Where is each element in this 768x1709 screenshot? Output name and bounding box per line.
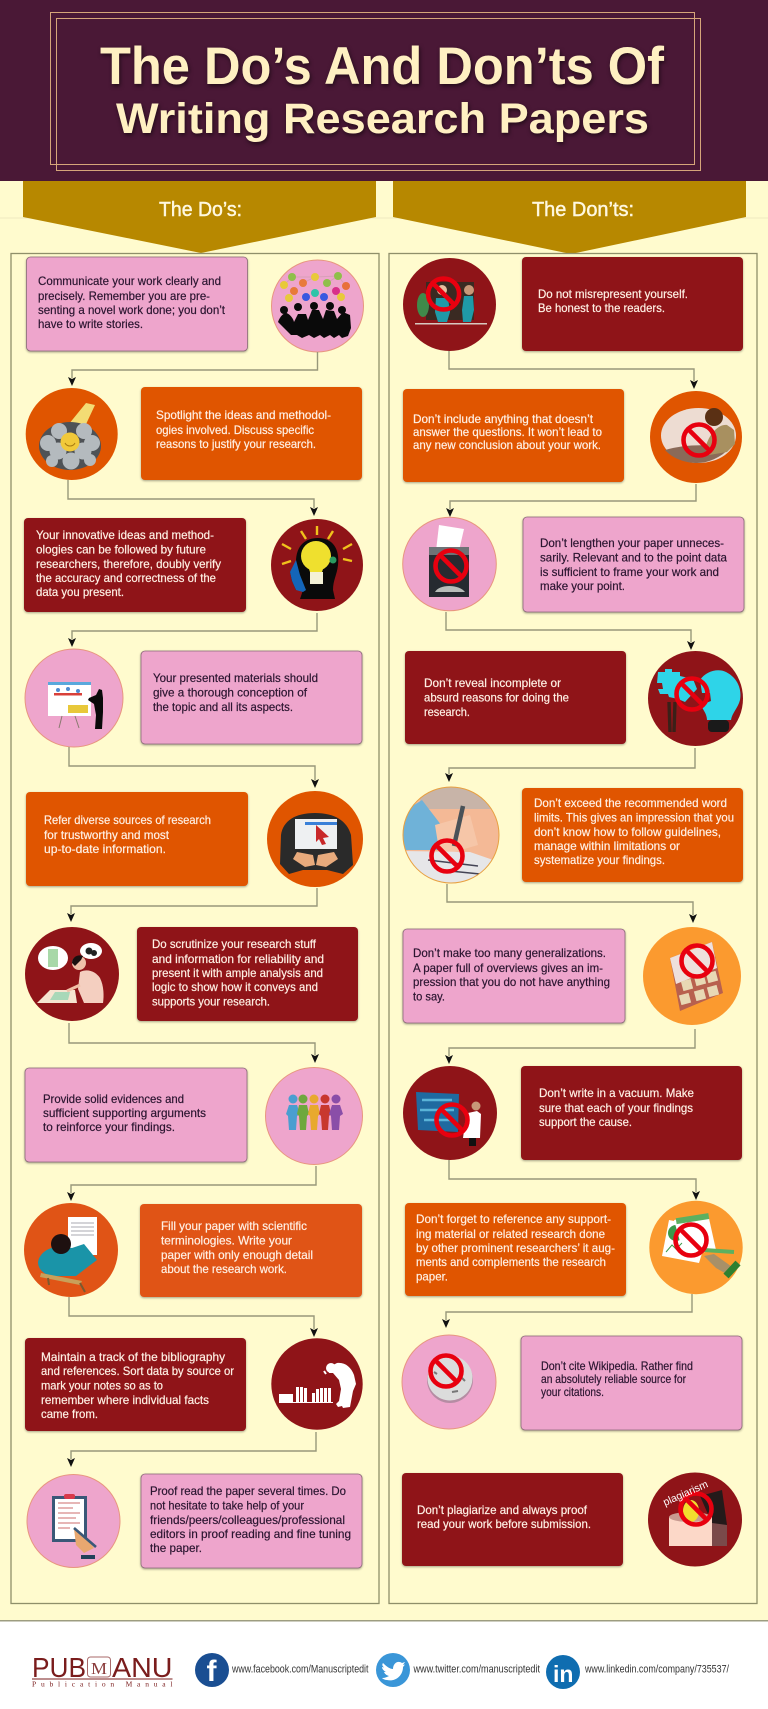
text box: for trustworthy and most [44, 828, 170, 842]
connector arrow [69, 1297, 318, 1337]
text box: Fill your paper with scientific [161, 1219, 307, 1233]
heading: The Do's: The Do’s: [159, 199, 242, 221]
icon: paper shredder, prohibited [403, 517, 496, 611]
text box: came from. [41, 1407, 98, 1421]
icon: linkedin [546, 1655, 580, 1689]
title: The Do’s And Don’ts Of [100, 37, 664, 96]
text box: Communicate your work clearly and [38, 274, 221, 288]
icon: man writing with thought bubbles [25, 927, 119, 1021]
connector arrow [445, 1029, 695, 1064]
text box: answer the questions. It won’t lead to [413, 425, 602, 439]
don't 5 [403, 787, 743, 883]
text box: A paper full of overviews gives an im- [413, 961, 603, 975]
text box: by other prominent researchers’ it aug- [416, 1241, 615, 1255]
do 4 [25, 649, 362, 747]
text box [405, 1203, 626, 1296]
text box: Your innovative ideas and method- [36, 528, 214, 542]
text box: research. [424, 705, 470, 719]
do 8 [24, 1203, 362, 1297]
connector arrow [68, 480, 318, 516]
text box: ologies can be followed by future [36, 542, 206, 556]
text box: don’t know how to follow guidelines, [534, 825, 721, 839]
icon: person at desk seen from behind [24, 1203, 118, 1297]
text box: Do scrutinize your research stuff [152, 937, 317, 951]
text box: senting a novel work done; you don’t [38, 303, 226, 317]
text box: Maintain a track of the bibliography [41, 1350, 225, 1364]
text box: make your point. [540, 579, 625, 593]
text box: remember where individual facts [41, 1393, 209, 1407]
don't 4 [405, 651, 743, 746]
text box: Be honest to the readers. [538, 301, 665, 315]
text box: paper. [416, 1270, 448, 1284]
connector arrow [445, 748, 695, 782]
text box [141, 1474, 362, 1568]
text box: Don’t make too many generalizations. [413, 946, 606, 960]
text box: Don’t reveal incomplete or [424, 676, 561, 690]
text box: manage within limitations or [534, 839, 680, 853]
text box: friends/peers/colleagues/professional [150, 1513, 345, 1527]
header banner [0, 0, 768, 181]
do 2 [26, 387, 362, 480]
text box: logic to show how it conveys and [152, 980, 318, 994]
heading: The Don'ts: The Don’ts: [532, 199, 634, 221]
icon: people at table, prohibited [403, 258, 496, 351]
icon: facebook [195, 1653, 229, 1688]
icon: spotlight on smiling ball [26, 388, 118, 480]
logo: PubManu: ANU [112, 1652, 172, 1683]
do 7 [25, 1068, 362, 1164]
icon: clipboard with hand and pen [27, 1474, 120, 1568]
heading: The Don'ts [393, 181, 746, 254]
text box: to say. [413, 990, 445, 1004]
text box: Provide solid evidences and [43, 1092, 184, 1106]
text box [141, 651, 362, 744]
text box: support the cause. [539, 1115, 632, 1129]
text box: Don’t exceed the recommended word [534, 796, 727, 810]
connector arrow [446, 612, 695, 650]
text box: Do not misrepresent yourself. [538, 287, 688, 301]
text box: give a thorough conception of [153, 686, 308, 700]
panel: do's column frame [11, 254, 379, 1604]
text box: your citations. [541, 1385, 604, 1399]
text box: editors in proof reading and fine tuning [150, 1527, 351, 1541]
text box: Don’t forget to reference any support- [416, 1212, 611, 1226]
text box: reasons to justify your research. [156, 437, 316, 451]
text box: Don’t cite Wikipedia. Rather find [541, 1359, 693, 1373]
text box [24, 518, 246, 612]
text box [140, 1204, 362, 1297]
do 3 [24, 518, 363, 612]
text box: data you present. [36, 585, 124, 599]
text box: limits. This gives an impression that you [534, 810, 734, 824]
panel: don'ts column frame [389, 254, 757, 1604]
text box: Don’t write in a vacuum. Make [539, 1086, 694, 1100]
icon: man inspecting books [271, 1338, 363, 1430]
icon: laptop typing [267, 791, 363, 887]
heading: The Do's [23, 181, 376, 253]
icon: facebook: f [206, 1655, 218, 1688]
icon: documents and pen, prohibited [649, 1201, 743, 1294]
do 1 [26, 257, 364, 352]
icon: plagiarism idea theft, prohibited: plagiarism [661, 1478, 710, 1509]
text box: Proof read the paper several times. Do [150, 1484, 346, 1498]
text box: terminologies. Write your [161, 1234, 292, 1248]
text box: pression that you do not have anything [413, 975, 610, 989]
icon: plagiarism idea theft, prohibited [648, 1472, 742, 1566]
icon: puzzle light bulb, prohibited [648, 651, 743, 746]
text box: read your work before submission. [417, 1517, 591, 1531]
do 6 [25, 927, 358, 1021]
connector arrow [68, 613, 317, 647]
icon: Wikipedia globe, prohibited [402, 1335, 496, 1429]
text box: to reinforce your findings. [43, 1120, 175, 1134]
don't 3 [403, 517, 744, 612]
text box [25, 1068, 247, 1162]
connector arrow [67, 1166, 316, 1201]
text box [403, 389, 624, 482]
icon: meeting silhouettes with idea network [272, 260, 364, 352]
icon: twitter [376, 1653, 410, 1687]
icon: sticky notes, prohibited [643, 927, 741, 1025]
logo: PubManu: Publication Manual [32, 1680, 172, 1688]
text box: systematize your findings. [534, 853, 665, 867]
connector arrow [442, 1294, 692, 1328]
text box: the topic and all its aspects. [153, 700, 293, 714]
text box [403, 929, 625, 1023]
linkedin url: www.linkedin.com/company/735537/ [584, 1664, 730, 1676]
don't 9 [402, 1335, 742, 1430]
connector arrow [69, 1023, 319, 1063]
connector arrow [449, 351, 698, 389]
text box: and information for reliability and [152, 952, 324, 966]
title [100, 37, 664, 143]
text box: an absolutely reliable source for [541, 1372, 686, 1386]
text box: and references. Sort data by source or [41, 1364, 234, 1378]
icon: hand writing on paper, prohibited [403, 787, 499, 883]
text box: up-to-date information. [44, 842, 166, 856]
text box: Don’t plagiarize and always proof [417, 1503, 588, 1517]
text box: the paper. [150, 1541, 202, 1555]
footer [0, 1622, 768, 1709]
text box: Don’t lengthen your paper unneces- [540, 536, 724, 550]
text box: is sufficient to frame your work and [540, 565, 719, 579]
don't 10 [402, 1472, 742, 1566]
logo: PubManu: M [91, 1659, 107, 1678]
connector arrow [449, 1160, 700, 1200]
text box: Refer diverse sources of research [44, 813, 211, 827]
do 9 [25, 1338, 363, 1431]
text box: mark your notes so as to [41, 1378, 163, 1392]
text box: present it with ample analysis and [152, 966, 323, 980]
text box: sure that each of your findings [539, 1101, 693, 1115]
icon: scientist at data wall, prohibited [403, 1066, 497, 1160]
don't 1 [403, 257, 743, 351]
text box: precisely. Remember you are pre- [38, 289, 210, 303]
icon: five colored people [266, 1068, 362, 1164]
text box: sarily. Relevant and to the point data [540, 550, 727, 564]
text box: have to write stories. [38, 317, 143, 331]
text box: about the research work. [161, 1262, 287, 1276]
icon: linkedin: in [553, 1661, 573, 1687]
text box [25, 1338, 246, 1431]
text box: Your presented materials should [153, 671, 318, 685]
text box [402, 1473, 623, 1566]
connector arrow [68, 352, 318, 386]
text box: ments and complements the research [416, 1255, 606, 1269]
connector arrow [447, 884, 697, 923]
text box: paper with only enough detail [161, 1248, 313, 1262]
icon: head with light bulb [271, 519, 363, 611]
text box [521, 1066, 742, 1160]
text box: the accuracy and correctness of the [36, 571, 216, 585]
connector arrow [67, 888, 317, 922]
text box: any new conclusion about your work. [413, 438, 601, 452]
twitter url: www.twitter.com/manuscriptedit [413, 1664, 540, 1676]
connector arrow [69, 747, 319, 788]
text box [523, 517, 744, 612]
don't 8 [405, 1201, 743, 1296]
don't 6 [403, 927, 741, 1025]
text box [141, 387, 362, 480]
text box: absurd reasons for doing the [424, 690, 569, 704]
text box [522, 788, 743, 882]
text box: ogies involved. Discuss specific [156, 423, 314, 437]
logo: PubManu [32, 1652, 172, 1688]
text box: Spotlight the ideas and methodol- [156, 408, 331, 422]
text box [137, 927, 358, 1021]
icon: woman presenting at board [25, 649, 123, 747]
text box: not hesitate to take help of your [150, 1498, 304, 1512]
facebook url: www.facebook.com/Manuscriptedit [231, 1664, 368, 1676]
text box: ing material or related research done [416, 1227, 605, 1241]
do 5 [26, 791, 363, 887]
text box: researchers, therefore, doubly verify [36, 557, 221, 571]
connector arrow [446, 484, 696, 517]
text box [26, 257, 248, 351]
logo: PubManu: PUB [32, 1652, 86, 1683]
text box [26, 792, 248, 886]
text box [521, 1336, 742, 1430]
text box: supports your research. [152, 994, 270, 1008]
text box [405, 651, 626, 744]
text box: sufficient supporting arguments [43, 1106, 206, 1120]
connector arrow [67, 1432, 316, 1467]
don't 2 [403, 389, 742, 483]
text box: Don’t include anything that doesn’t [413, 412, 594, 426]
title: Writing Research Papers [116, 95, 649, 143]
text box [522, 257, 743, 351]
do 10 [27, 1474, 362, 1568]
icon: man at desk, prohibited [650, 391, 742, 483]
don't 7 [403, 1066, 742, 1160]
